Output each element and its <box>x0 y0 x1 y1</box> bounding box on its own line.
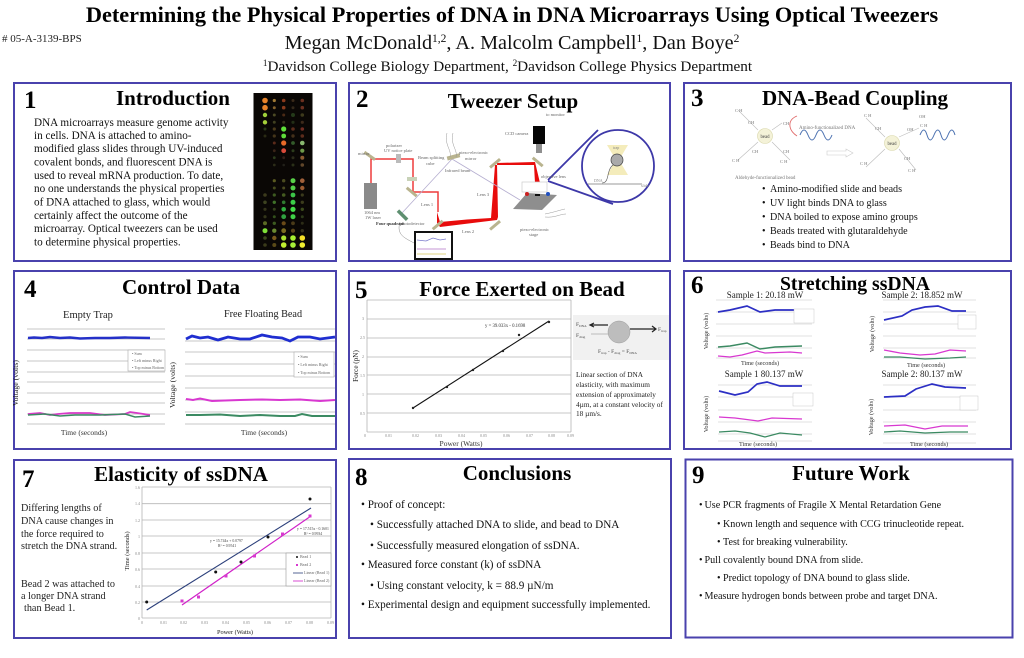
chart: sample 2 18.852 mW: Time (seconds) <box>907 362 945 369</box>
legend <box>294 352 334 377</box>
chart: force vs power: 0.01 <box>385 433 392 438</box>
chart: force vs power: 0.03 <box>435 433 442 438</box>
heading: control data: Control Data <box>122 275 241 299</box>
chart: force vs power: y = 39.033x - 0.1698 <box>485 324 526 329</box>
force diagram: DNA <box>629 351 637 355</box>
abstract number: # 05-A-3139-BPS <box>2 33 82 45</box>
side text: the force required to <box>21 529 104 540</box>
force diagram: drag <box>579 335 586 339</box>
force diagram: F <box>576 333 579 339</box>
future work list: • <box>717 519 721 530</box>
conclusions list <box>361 499 651 611</box>
coupling diagram: bead <box>887 142 897 147</box>
diagram labels: mirror <box>465 156 477 161</box>
chart: sample 1 20.18 mW: Time (seconds) <box>741 360 779 367</box>
chart: time vs power: 0.04 <box>222 620 229 625</box>
chart: time vs power: Power (Watts) <box>217 629 253 636</box>
panel number 9: 9 <box>692 462 704 489</box>
laser box <box>364 183 377 209</box>
chart: force vs power: 0.08 <box>548 433 555 438</box>
caption <box>576 370 663 418</box>
chart: force vs power: Power (Watts) <box>440 439 483 448</box>
chart: time vs power <box>124 485 334 636</box>
bullet list: • <box>762 226 766 237</box>
chart: free floating bead: Free Floating Bead <box>224 309 302 320</box>
chart: time vs power: 1.4 <box>135 501 140 506</box>
panel: conclusions <box>349 459 671 638</box>
optical setup diagram <box>358 112 654 259</box>
future work list: Known length and sequence with CCG trinucleotide repeat. <box>723 519 964 530</box>
legend <box>128 350 165 371</box>
heading: introduction: Introduction <box>116 86 230 110</box>
future work list: • <box>699 555 703 566</box>
chart: time vs power: y = 17.515x - 0.1601 <box>297 527 329 531</box>
future work list: • <box>717 537 721 548</box>
conclusions list: • Successfully attached DNA to slide, and bead to DNA <box>370 519 619 531</box>
force diagram: drag <box>614 351 621 355</box>
panel: tweezer setup <box>349 83 670 261</box>
monitor <box>415 232 452 259</box>
chart: sample 1 20.18 mW <box>703 290 814 367</box>
heading: force exerted on bead: Force Exerted on Bead <box>419 277 625 301</box>
bead right <box>884 136 900 150</box>
chart: time vs power: 0 <box>141 620 143 625</box>
bullet list: • <box>762 212 766 223</box>
side text: a longer DNA strand <box>21 591 106 602</box>
chart: time vs power: Time (seconds) <box>124 531 131 571</box>
chart: sample 2 80.137 mW <box>868 369 978 448</box>
coupling diagram <box>732 108 955 181</box>
future work list: Pull covalently bound DNA from slide. <box>704 555 863 566</box>
chart: sample 2 80.137 mW: Sample 2: 80.137 mW <box>882 369 963 379</box>
future work list: • <box>699 500 703 511</box>
title: Determining the Physical Properties of DNA in DNA Microarrays Using Optical Tweezers <box>86 2 938 27</box>
diagram labels: Lens 3 <box>477 192 490 197</box>
affiliations: 2 <box>513 58 518 68</box>
legend: • Left minus Right <box>132 358 163 363</box>
force diagram: F <box>658 327 661 333</box>
affiliations: 1 <box>263 58 268 68</box>
intro text: certainly affect the outcome of the <box>34 210 188 222</box>
reaction arrow <box>827 149 853 157</box>
future work list: • <box>717 573 721 584</box>
chart: time vs power: 0.06 <box>264 620 271 625</box>
chart: empty trap <box>11 310 165 437</box>
panel: control data <box>11 271 336 449</box>
panel number 7: 7 <box>22 466 34 493</box>
force diagram: = F <box>620 349 629 355</box>
conclusions list: • Successfully measured elongation of ssDNA. <box>370 540 580 552</box>
future work list: Test for breaking vulnerability. <box>723 537 848 548</box>
future work list: Predict topology of DNA bound to glass slide. <box>723 573 910 584</box>
side text: than Bead 1. <box>24 603 75 614</box>
diagram labels: piezo-electronic <box>459 150 488 155</box>
panel: DNA-bead coupling <box>684 83 1011 261</box>
chart: time vs power: 0.02 <box>180 620 187 625</box>
authors: Megan McDonald <box>285 32 432 54</box>
coupling diagram: CH <box>783 149 790 154</box>
bullet list: • <box>762 198 766 209</box>
diagram labels: Infrared beam <box>445 168 471 173</box>
chart: sample 1 80.137 mW: Time (seconds) <box>739 441 777 448</box>
diagram labels: Beam splitting <box>418 155 445 160</box>
future work list: Measure hydrogen bonds between probe and target DNA. <box>704 591 938 602</box>
DNA strands <box>800 130 832 140</box>
legend: Bead 2 <box>300 562 311 567</box>
coupling diagram: C H <box>864 113 872 118</box>
chart: sample 2 18.852 mW: Voltage (volts) <box>869 316 876 352</box>
coupling diagram: C H <box>780 159 788 164</box>
panel number 8: 8 <box>355 464 368 491</box>
chart: force vs power: 0.04 <box>458 433 465 438</box>
coupling diagram: Amino-functionalized DNA <box>799 126 856 131</box>
coupling diagram: C H <box>860 161 868 166</box>
chart: time vs power: 0 <box>138 616 140 621</box>
diagram labels: photodetector <box>400 221 425 226</box>
chart: empty trap: Voltage (volts) <box>11 360 20 406</box>
chart: time vs power: 1 <box>138 534 140 539</box>
chart: free floating bead: Time (seconds) <box>241 428 288 437</box>
optical setup diagram: DNA <box>594 178 603 183</box>
heading: DNA-bead coupling: DNA-Bead Coupling <box>762 86 949 110</box>
caption: extension of approximately <box>576 390 656 399</box>
diagram labels: Four quadrant <box>376 221 405 226</box>
chart: time vs power: R² = 0.9541 <box>218 544 236 548</box>
chart: force vs power: 2 <box>362 354 364 359</box>
chart: time vs power: 0.07 <box>285 620 292 625</box>
chart: sample 1 80.137 mW: Voltage (volts) <box>703 396 710 432</box>
coupling diagram: CH <box>875 126 882 131</box>
chart: force vs power: Force (pN) <box>352 350 360 382</box>
chart: force vs power: 0.05 <box>480 433 487 438</box>
panel number 4: 4 <box>24 276 37 303</box>
chart: sample 2 80.137 mW: Time (seconds) <box>910 441 948 448</box>
chart: force vs power: 0.5 <box>360 411 365 416</box>
diagram labels: piezo-electronic <box>520 227 549 232</box>
side text: Bead 2 was attached to <box>21 579 115 590</box>
diagram labels: 1W laser <box>365 215 382 220</box>
heading: future work: Future Work <box>792 461 910 485</box>
coupling diagram: C H <box>908 168 916 173</box>
chart: force vs power: 0.09 <box>567 433 574 438</box>
chart: sample 1 80.137 mW <box>703 369 813 448</box>
chart: force vs power: 0.06 <box>503 433 510 438</box>
chart: force vs power: 1 <box>362 392 364 397</box>
diagram labels: Lens 1 <box>421 202 433 207</box>
optical setup diagram: slide <box>641 183 649 188</box>
chart: empty trap: Time (seconds) <box>61 428 108 437</box>
future work list: Use PCR fragments of Fragile X Mental Retardation Gene <box>704 500 942 511</box>
chart: time vs power: 0.09 <box>327 620 334 625</box>
legend: • Sum <box>132 351 143 356</box>
bullet list: • <box>762 240 766 251</box>
bead left <box>758 128 772 144</box>
intro text: covalent bonds, and fluorescent DNA is <box>34 156 212 168</box>
diagram labels: stage <box>529 232 538 237</box>
coupling diagram: CH <box>752 149 759 154</box>
side text: Differing lengths of <box>21 503 102 514</box>
legend: • Sum <box>298 354 309 359</box>
chart: sample 2 80.137 mW: Voltage (volts) <box>868 399 875 435</box>
panel: stretching ssDNA <box>684 271 1011 449</box>
coupling diagram: CH <box>783 121 790 126</box>
bullet list <box>762 184 918 251</box>
force diagram: F <box>598 349 601 355</box>
chart: time vs power: 0.03 <box>201 620 208 625</box>
caption: Linear section of DNA <box>576 370 644 379</box>
panel number 5: 5 <box>355 277 368 304</box>
coupling diagram: C H <box>920 123 928 128</box>
intro text: used to reveal mRNA production. To date, <box>34 170 223 182</box>
panel number 2: 2 <box>356 86 368 113</box>
chart: free floating bead <box>168 309 335 437</box>
force diagram <box>573 315 669 360</box>
heading: tweezer setup: Tweezer Setup <box>448 89 578 113</box>
legend: • Top minus Bottom <box>132 365 165 370</box>
legend: • Top minus Bottom <box>298 370 331 375</box>
coupling diagram: OH <box>919 114 926 119</box>
chart: sample 2 18.852 mW <box>869 290 976 369</box>
side text: stretch the DNA strand. <box>21 541 117 552</box>
legend: Bead 1 <box>300 554 311 559</box>
chart: time vs power: 1.6 <box>135 485 140 490</box>
authors: 1,2 <box>432 33 447 45</box>
conclusions list: • Experimental design and equipment successfully implemented. <box>361 599 651 611</box>
panel: force exerted on bead <box>349 271 670 449</box>
force diagram: DNA <box>579 324 587 328</box>
chart: time vs power: 0.8 <box>135 551 140 556</box>
chart: sample 2 18.852 mW: Sample 2: 18.852 mW <box>882 290 963 300</box>
bullet list: DNA boiled to expose amino groups <box>770 212 918 223</box>
future work list: • <box>699 591 703 602</box>
conclusions list: • Proof of concept: <box>361 499 445 511</box>
diagram labels: objective lens <box>541 174 566 179</box>
chart: time vs power: 1.2 <box>135 518 140 523</box>
chart: sample 1 20.18 mW: Sample 1: 20.18 mW <box>727 290 804 300</box>
chart: force vs power: 0 <box>364 433 366 438</box>
intro text: DNA microarrays measure genome activity <box>34 117 229 129</box>
authors: 1 <box>637 33 643 45</box>
intro text: modified glass slides through UV-induced <box>34 143 223 155</box>
coupling diagram: OH <box>907 127 914 132</box>
legend <box>286 553 331 586</box>
chart: time vs power: y = 15.744x + 0.0797 <box>210 539 243 543</box>
diagram labels: cube <box>426 161 434 166</box>
chart: force vs power: 0.02 <box>412 433 419 438</box>
affiliations: Davidson College Biology Department, <box>267 58 513 75</box>
conclusions list: • Measured force constant (k) of ssDNA <box>361 559 541 571</box>
panel: introduction <box>14 83 336 261</box>
chart: sample 1 20.18 mW: Voltage (volts) <box>703 313 710 349</box>
diagram labels: Lens 2 <box>462 229 474 234</box>
panel number 1: 1 <box>24 87 36 114</box>
chart: empty trap: Empty Trap <box>63 310 113 321</box>
chart: force vs power: 0.07 <box>526 433 533 438</box>
affiliations <box>263 58 753 75</box>
caption: 18 µm/s. <box>576 409 602 418</box>
diagram labels: UV notice plate <box>384 148 412 153</box>
bullet list: Beads bind to DNA <box>770 240 851 251</box>
panel: elasticity of ssDNA <box>14 460 336 638</box>
diagram labels: CCD camera <box>505 131 528 136</box>
legend: • Left minus Right <box>298 362 329 367</box>
chart: time vs power: 0.6 <box>135 567 140 572</box>
chart: free floating bead: Voltage (volts) <box>168 362 177 408</box>
legend: Linear (Bead 2) <box>304 578 330 583</box>
intro text <box>34 117 229 248</box>
force diagram: trap <box>601 351 607 355</box>
diagram labels: mirror <box>358 151 370 156</box>
intro text: in cells. DNA is attached to amino- <box>34 130 192 142</box>
force diagram: - F <box>607 349 614 355</box>
coupling diagram: bead <box>760 135 770 140</box>
force diagram: trap <box>661 329 667 333</box>
caption: elasticity, with maximum <box>576 380 650 389</box>
chart: time vs power: 0.05 <box>243 620 250 625</box>
coupling diagram: Aldehyde-functionalized bead <box>735 176 796 181</box>
caption: 4µm, at a constant velocity of <box>576 400 663 409</box>
coupling diagram: CH <box>748 120 755 125</box>
chart: force vs power: 2.5 <box>360 335 365 340</box>
inset zoom circle <box>548 130 613 204</box>
bullet list: Beads treated with glutaraldehyde <box>770 226 908 237</box>
coupling diagram: CH <box>904 156 911 161</box>
chart: sample 1 80.137 mW: Sample 1 80.137 mW <box>725 369 804 379</box>
chart: time vs power: 0.2 <box>135 600 140 605</box>
chart: force vs power: 3 <box>362 316 364 321</box>
chart: time vs power: 0.4 <box>135 584 140 589</box>
force diagram: F <box>576 322 579 328</box>
intro text: microarray. Optical tweezers can be used <box>34 223 218 235</box>
future work list <box>699 500 964 602</box>
intro text: to determine physical properties. <box>34 236 181 248</box>
intro text: no one understands the physical properties <box>34 183 224 195</box>
bullet list: • <box>762 184 766 195</box>
affiliations: Davidson College Physics Department <box>517 58 753 75</box>
coupling diagram: C H <box>735 108 743 113</box>
legend: Linear (Bead 1) <box>304 570 330 575</box>
side text <box>21 503 117 614</box>
diagram labels: polarizer <box>386 143 402 148</box>
side text: DNA cause changes in <box>21 516 114 527</box>
chart: force vs power <box>352 300 574 448</box>
panel number 3: 3 <box>691 85 704 112</box>
mirrors <box>364 151 544 231</box>
heading: elasticity: Elasticity of ssDNA <box>94 462 269 486</box>
intro text: of DNA attached to glass, which would <box>34 196 211 208</box>
chart: time vs power: 0.01 <box>160 620 167 625</box>
authors: , Dan Boye <box>642 32 734 54</box>
diagram labels <box>358 112 566 237</box>
CCD camera <box>533 126 545 144</box>
chart: time vs power: 0.08 <box>306 620 313 625</box>
diagram labels: 1064 nm <box>364 210 380 215</box>
authors <box>285 32 740 54</box>
panel number 6: 6 <box>691 272 704 299</box>
panel: future work <box>686 460 1012 638</box>
coupling diagram: C H <box>732 158 740 163</box>
stage <box>513 193 557 210</box>
microarray image <box>254 93 312 250</box>
optical setup diagram: trap <box>613 145 619 150</box>
chart: force vs power: 1.5 <box>360 373 365 378</box>
bullet list: UV light binds DNA to glass <box>770 198 887 209</box>
heading: conclusions: Conclusions <box>463 461 571 485</box>
heading: stretching ssDNA: Stretching ssDNA <box>780 273 931 295</box>
authors: , A. Malcolm Campbell <box>446 32 637 54</box>
authors: 2 <box>734 33 740 45</box>
conclusions list: • Using constant velocity, k = 88.9 µN/m <box>370 580 554 592</box>
chart: time vs power: R² = 0.9934 <box>304 532 322 536</box>
bullet list: Amino-modified slide and beads <box>770 184 902 195</box>
diagram labels: to monitor <box>546 112 565 117</box>
